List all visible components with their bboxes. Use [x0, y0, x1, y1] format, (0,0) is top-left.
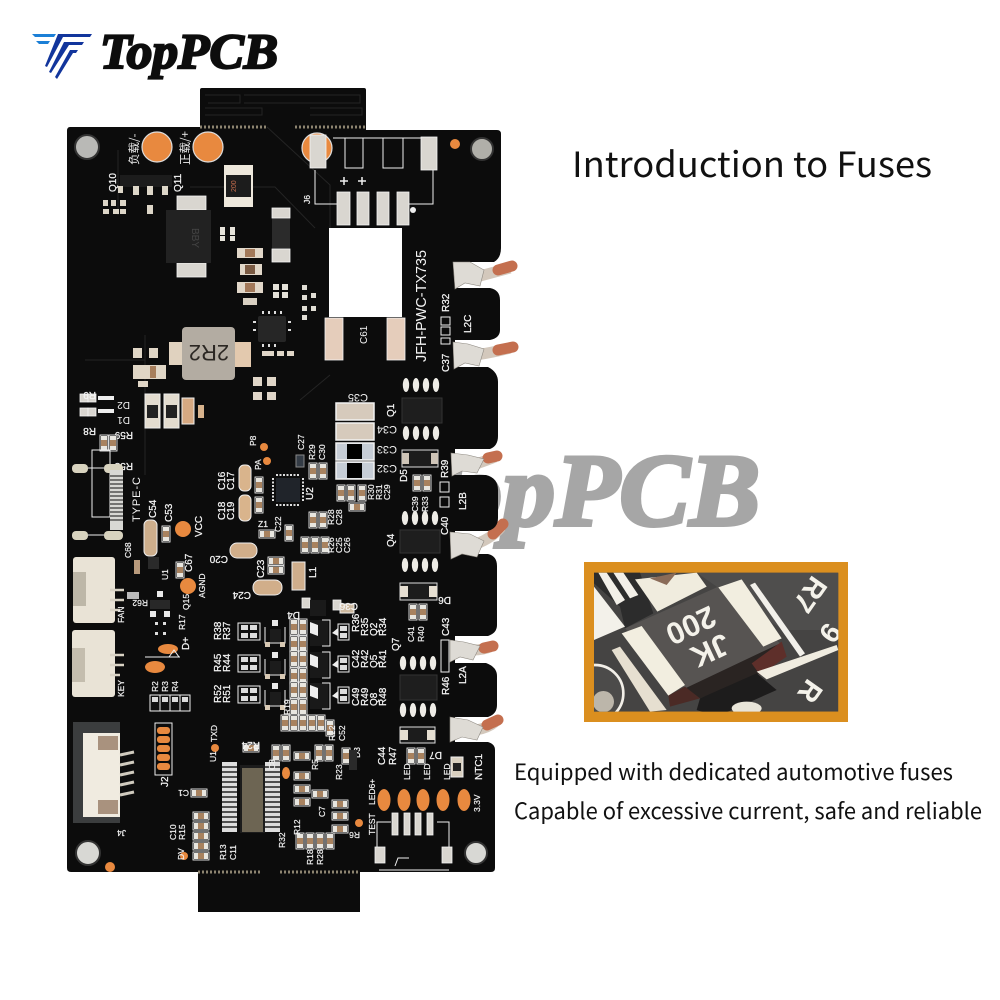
transistor rows: R36 [351, 613, 362, 632]
lower right LED labels and USB footprint: LED [422, 763, 432, 780]
QFN U2 and neighbours: U2 [305, 487, 316, 500]
C61 capacitor [325, 318, 405, 360]
top left parts: Q10, Q11 and labels: 正载/+ [177, 131, 193, 165]
inset photo: 200 [660, 599, 721, 651]
connector J4: J4 [117, 828, 126, 838]
QFN U2 and neighbours: PA [253, 459, 263, 470]
diodes D5, D6, D7: D7 [429, 749, 442, 760]
QFN U2 and neighbours: C29 [382, 484, 392, 500]
bottom centre resistor clusters: D3 [352, 747, 362, 758]
top left parts: Q10, Q11 and labels: Q11 [173, 173, 184, 192]
left bottom resistor column: C1 [178, 788, 189, 798]
QFN U2 and neighbours: C19 [226, 501, 237, 520]
MOSFET Q7: Q7 [391, 637, 402, 651]
resistor block R2 R3 R4: AGND [197, 573, 207, 598]
QFN U2 and neighbours: R26 [326, 537, 336, 553]
inset photo [594, 572, 838, 712]
transistor rows: R52 [213, 684, 224, 703]
coil silk labels: C40 [440, 516, 451, 535]
diodes D5, D6, D7 [399, 450, 451, 760]
left top small parts D1 D2 and chips: D1 [117, 414, 130, 425]
diodes D5, D6, D7: R33 [420, 496, 430, 512]
connector J4 [73, 722, 134, 838]
QFN U2 and neighbours: R29 [307, 444, 317, 460]
QFN U2 and neighbours: C25 [334, 537, 344, 553]
QFN U2 and neighbours: C26 [342, 537, 352, 553]
bottom centre resistor clusters: C52 [337, 725, 347, 741]
lower right LED labels and USB footprint: LED6+ [367, 779, 377, 805]
connector J2 pads [155, 723, 172, 787]
title: Introduction to Fuses [572, 137, 932, 188]
MCU SOP chip: TXD [209, 725, 219, 742]
transistor rows [213, 598, 389, 715]
QFN U2 and neighbours: C27 [296, 434, 306, 450]
copper traces [85, 95, 366, 872]
inset photo: JK [685, 626, 735, 674]
transistor rows: R34 [378, 617, 389, 636]
small inductors and regulator [220, 227, 316, 400]
QFN U2 and neighbours: C17 [226, 471, 237, 490]
bottom centre resistor clusters: R28 [315, 849, 325, 865]
resistor block R2 R3 R4 [123, 542, 207, 711]
bottom centre resistor clusters: R22 [327, 725, 337, 741]
resistor block R2 R3 R4: R17 [177, 614, 187, 630]
lower right LED labels and USB footprint: NTC1 [474, 753, 485, 780]
transistor rows: Q5 [369, 654, 380, 668]
logo wordmark: TopPCB [100, 23, 278, 79]
inset photo: R7 [786, 570, 833, 618]
USB type-C connector: VCC [194, 516, 205, 537]
left bottom resistor column: C11 [228, 845, 238, 860]
inset orange frame [584, 562, 848, 722]
resistor block R2 R3 R4: R62 [132, 598, 148, 608]
QFN U2 and neighbours: C30 [317, 444, 327, 460]
capacitors C32 to C35: C35 [348, 391, 368, 403]
bottom centre resistor clusters: R23 [334, 764, 344, 780]
coil silk labels: C37 [441, 353, 452, 372]
coil silk labels [440, 293, 474, 695]
diodes D5, D6, D7: R40 [416, 626, 426, 642]
bottom centre resistor clusters: R6 [349, 830, 360, 840]
lower right LED labels and USB footprint: R47 [388, 746, 399, 765]
resistor block R2 R3 R4: R3 [160, 681, 170, 692]
left bottom resistor column: R13 [218, 844, 228, 860]
diodes D5, D6, D7: D5 [399, 469, 410, 482]
resistor block R2 R3 R4: C68 [123, 542, 133, 558]
large diode BBY: BBY [189, 228, 200, 248]
capacitors C32 to C35: C32 [377, 462, 397, 474]
pcb board [67, 88, 513, 912]
MOSFET Q4 [386, 511, 440, 572]
left top small parts D1 D2 and chips: R59 [114, 429, 133, 440]
transistor rows: R35 [360, 617, 371, 636]
resistor block R2 R3 R4: Q15 [181, 594, 191, 610]
large diode BBY [166, 196, 211, 277]
cap group C20 C24 and L1: C24 [232, 589, 251, 600]
transistor rows: R51 [222, 684, 233, 703]
cap group C20 C24 and L1: C20 [209, 553, 228, 564]
logo: TopPCB [32, 23, 278, 79]
bottom centre resistor clusters: R32 [277, 832, 287, 848]
top left parts: Q10, Q11 and labels: 负载/- [126, 133, 142, 165]
diode SS34 [272, 208, 290, 262]
board name: JFH-PWC-TX735 [414, 250, 430, 362]
cap group C20 C24 and L1 [209, 543, 319, 600]
QFN U2 and neighbours: R28 [326, 509, 336, 525]
capacitors C32 to C35 [336, 391, 397, 479]
MOSFET Q1 [386, 378, 442, 440]
left bottom resistor column: DV [176, 848, 186, 860]
caption text [514, 755, 982, 826]
connector FAN [73, 557, 126, 623]
transistor rows: R48 [378, 687, 389, 706]
orange test pads [105, 132, 470, 872]
QFN U2 and neighbours: R30 [366, 484, 376, 500]
transistor rows: C36 [339, 600, 358, 611]
cap group C20 C24 and L1: C23 [256, 559, 267, 578]
QFN U2 and neighbours: C22 [273, 516, 283, 532]
MCU SOP chip [208, 725, 280, 833]
connector KEY: KEY [116, 680, 126, 697]
transistor rows: R38 [213, 621, 224, 640]
fuse resistor 200 on board [224, 165, 253, 207]
transistor rows: C49 [351, 687, 362, 706]
inductor 2R2 [169, 327, 251, 380]
coil silk labels: L2C [463, 315, 474, 333]
QFN U2 and neighbours: P8 [248, 435, 258, 446]
transistor rows: R41 [378, 649, 389, 668]
MOSFET Q7 [391, 637, 437, 717]
QFN U2 and neighbours [217, 434, 392, 553]
caption line 1: Equipped with dedicated automotive fuses [514, 755, 953, 787]
cap group C20 C24 and L1: L1 [308, 566, 319, 578]
resistor block R2 R3 R4: C67 [184, 553, 195, 572]
bottom centre resistor clusters [267, 699, 362, 865]
coil silk labels: C43 [441, 617, 452, 636]
transistor rows: R44 [222, 653, 233, 672]
QFN U2 and neighbours: C16 [217, 471, 228, 490]
transistor rows: R37 [222, 621, 233, 640]
lower right LED labels and USB footprint: TEST [367, 813, 377, 835]
bottom centre resistor clusters: C7 [317, 806, 327, 817]
transistor rows: Q2 [369, 622, 380, 636]
coil silk labels: L2A [458, 666, 469, 684]
left top small parts D1 D2 and chips: R9 [83, 389, 96, 400]
C61 capacitor: C61 [359, 325, 370, 344]
QFN U2 and neighbours: C18 [217, 501, 228, 520]
lower right LED labels and USB footprint: C44 [377, 746, 388, 765]
coil silk labels: R39 [440, 459, 451, 478]
top left parts: Q10, Q11 and labels: Q10 [108, 173, 119, 192]
connector FAN: FAN [116, 606, 126, 623]
left bottom resistor column: C10 [168, 824, 178, 840]
cutout window [329, 228, 402, 317]
USB type-C connector: C53 [164, 503, 175, 522]
transistor rows: D4 [287, 609, 300, 620]
bottom centre resistor clusters: R19 [282, 699, 292, 715]
left bottom resistor column [168, 788, 238, 860]
capacitors C32 to C35: C33 [377, 443, 397, 455]
connector J2 pads: J2 [160, 776, 171, 787]
USB type-C connector [72, 450, 205, 556]
MOSFET Q4: Q4 [386, 533, 397, 547]
left top small parts D1 D2 and chips: R8 [83, 425, 96, 436]
resistor block R2 R3 R4: R2 [150, 681, 160, 692]
left top small parts D1 D2 and chips: R58 [114, 460, 133, 471]
bottom centre resistor clusters: R12 [292, 819, 302, 835]
mounting holes [75, 135, 493, 865]
coil silk labels: R46 [441, 676, 452, 695]
transistor rows: R42 [360, 649, 371, 668]
fuse close-up inset [567, 562, 848, 722]
resistor block R2 R3 R4: R4 [170, 681, 180, 692]
MCU SOP chip: U1 [208, 751, 218, 762]
QFN U2 and neighbours: C28 [334, 509, 344, 525]
capacitors C32 to C35: C34 [377, 423, 397, 435]
lower right LED labels and USB footprint: LED [402, 763, 412, 780]
caption line 2: Capable of excessive current, safe and reliable [514, 794, 982, 826]
QFN U2 and neighbours: R31 [374, 484, 384, 500]
left top small parts D1 D2 and chips: D2 [117, 399, 130, 410]
fuse resistor 200 on board: 200 [231, 180, 238, 192]
left top small parts D1 D2 and chips [80, 348, 204, 471]
lower right LED labels and USB footprint: 3.3V [472, 794, 482, 812]
connector KEY [72, 630, 126, 697]
coil silk labels: R32 [441, 293, 452, 312]
diodes D5, D6, D7: C39 [410, 496, 420, 512]
USB type-C connector: TYPE-C [131, 477, 143, 522]
solder wires [473, 266, 513, 730]
diodes D5, D6, D7: C41 [406, 626, 416, 642]
board outline [67, 88, 501, 912]
transistor rows: R49 [360, 687, 371, 706]
lower right LED labels and USB footprint: LED [442, 763, 452, 780]
inset photo: R [791, 673, 829, 708]
inductor 2R2: 2R2 [189, 340, 229, 365]
watermark: TopPCB: TopPCB [395, 434, 760, 548]
MCU SOP chip: R24 [241, 739, 260, 750]
solder wire pads [450, 262, 484, 742]
transistor rows: Q8 [369, 692, 380, 706]
resistor block R2 R3 R4: U1 [160, 569, 170, 580]
diodes D5, D6, D7: D6 [438, 594, 451, 605]
QFN U2 and neighbours: Z1 [258, 519, 268, 529]
J6 connector footprint: J6 [302, 195, 312, 204]
bottom centre resistor clusters: R18 [305, 849, 315, 865]
icon: blue stripes logo mark [32, 34, 92, 79]
bottom centre resistor clusters: R5 [310, 759, 320, 770]
J6 connector footprint [302, 135, 437, 225]
transistor rows: R45 [213, 653, 224, 672]
MOSFET Q1: Q1 [386, 403, 397, 417]
coil silk labels: L2B [458, 492, 469, 510]
bottom centre resistor clusters: C8 [267, 759, 277, 770]
USB type-C connector: C54 [148, 499, 159, 518]
lower right LED labels and USB footprint [367, 746, 485, 870]
left bottom resistor column: R15 [177, 824, 187, 840]
transistor rows: C42 [351, 649, 362, 668]
top left parts: Q10, Q11 and labels [103, 131, 193, 214]
resistor block R2 R3 R4: D+ [181, 637, 192, 650]
inset photo: 9 [812, 617, 847, 648]
